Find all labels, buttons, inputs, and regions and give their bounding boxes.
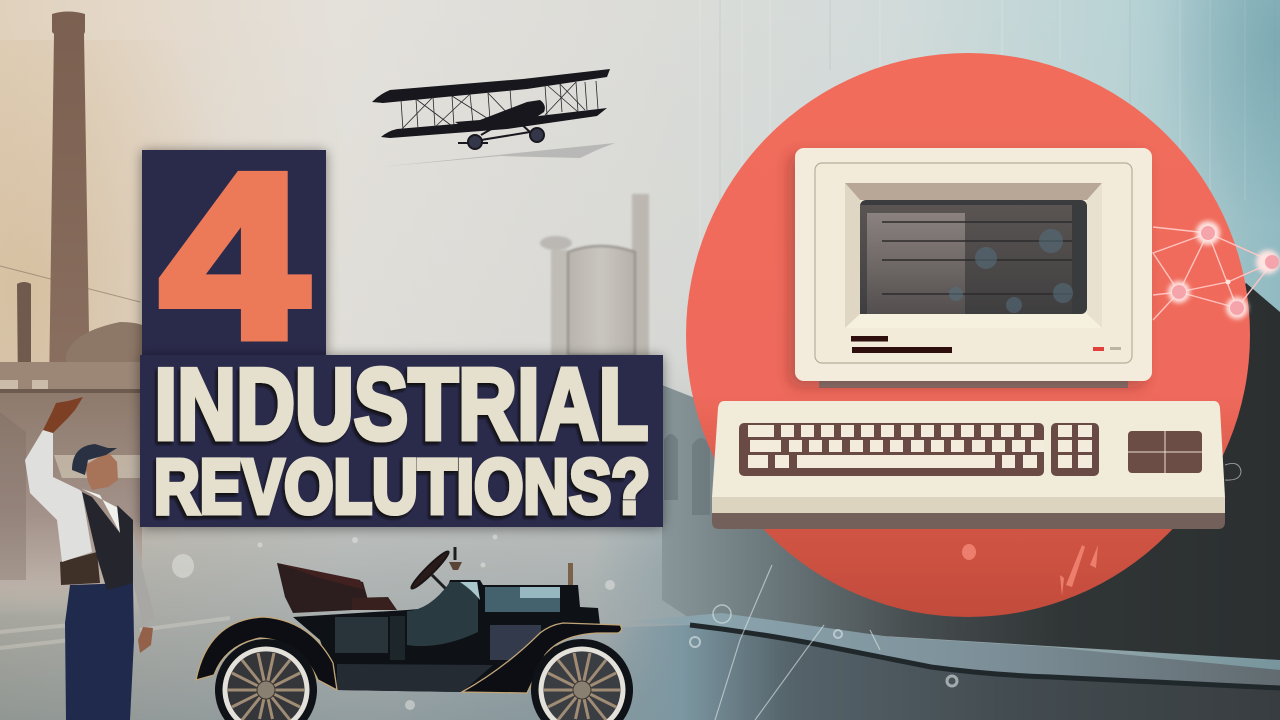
- trousers: [65, 583, 134, 720]
- biplane: [372, 69, 610, 149]
- monitor screen: [860, 200, 1087, 314]
- computer monitor: [795, 148, 1152, 388]
- sleeves and shirt: [25, 430, 92, 562]
- trackpad: [1128, 431, 1202, 473]
- running board: [337, 664, 493, 692]
- plane shadow: [380, 143, 615, 167]
- dust specks: [172, 534, 615, 710]
- left factory with chimneys: [0, 12, 230, 648]
- rear wheel: [215, 639, 317, 720]
- headline panel: [140, 349, 663, 530]
- right factory with tanks: [540, 194, 649, 359]
- network nodes: [1153, 221, 1280, 320]
- street: [600, 565, 1280, 720]
- computer keyboard: [712, 401, 1241, 529]
- numeral 4: 4: [161, 127, 307, 386]
- steering wheel and lamp: [409, 549, 451, 591]
- headline line 1: INDUSTRIAL: [154, 349, 648, 461]
- red circle: [686, 53, 1250, 617]
- dark brick building right: [662, 283, 1280, 660]
- number panel: [142, 127, 326, 386]
- front wheel: [531, 639, 633, 720]
- fenders: [196, 617, 337, 690]
- vest: [82, 492, 133, 590]
- car body: [293, 580, 600, 692]
- man pointing: [25, 397, 155, 720]
- vintage car: [196, 547, 633, 720]
- hands: [43, 397, 83, 433]
- car seats: [277, 563, 368, 613]
- headline line 2: REVOLUTIONS?: [154, 444, 650, 530]
- monitor labels: [851, 336, 1121, 353]
- head: [85, 452, 118, 490]
